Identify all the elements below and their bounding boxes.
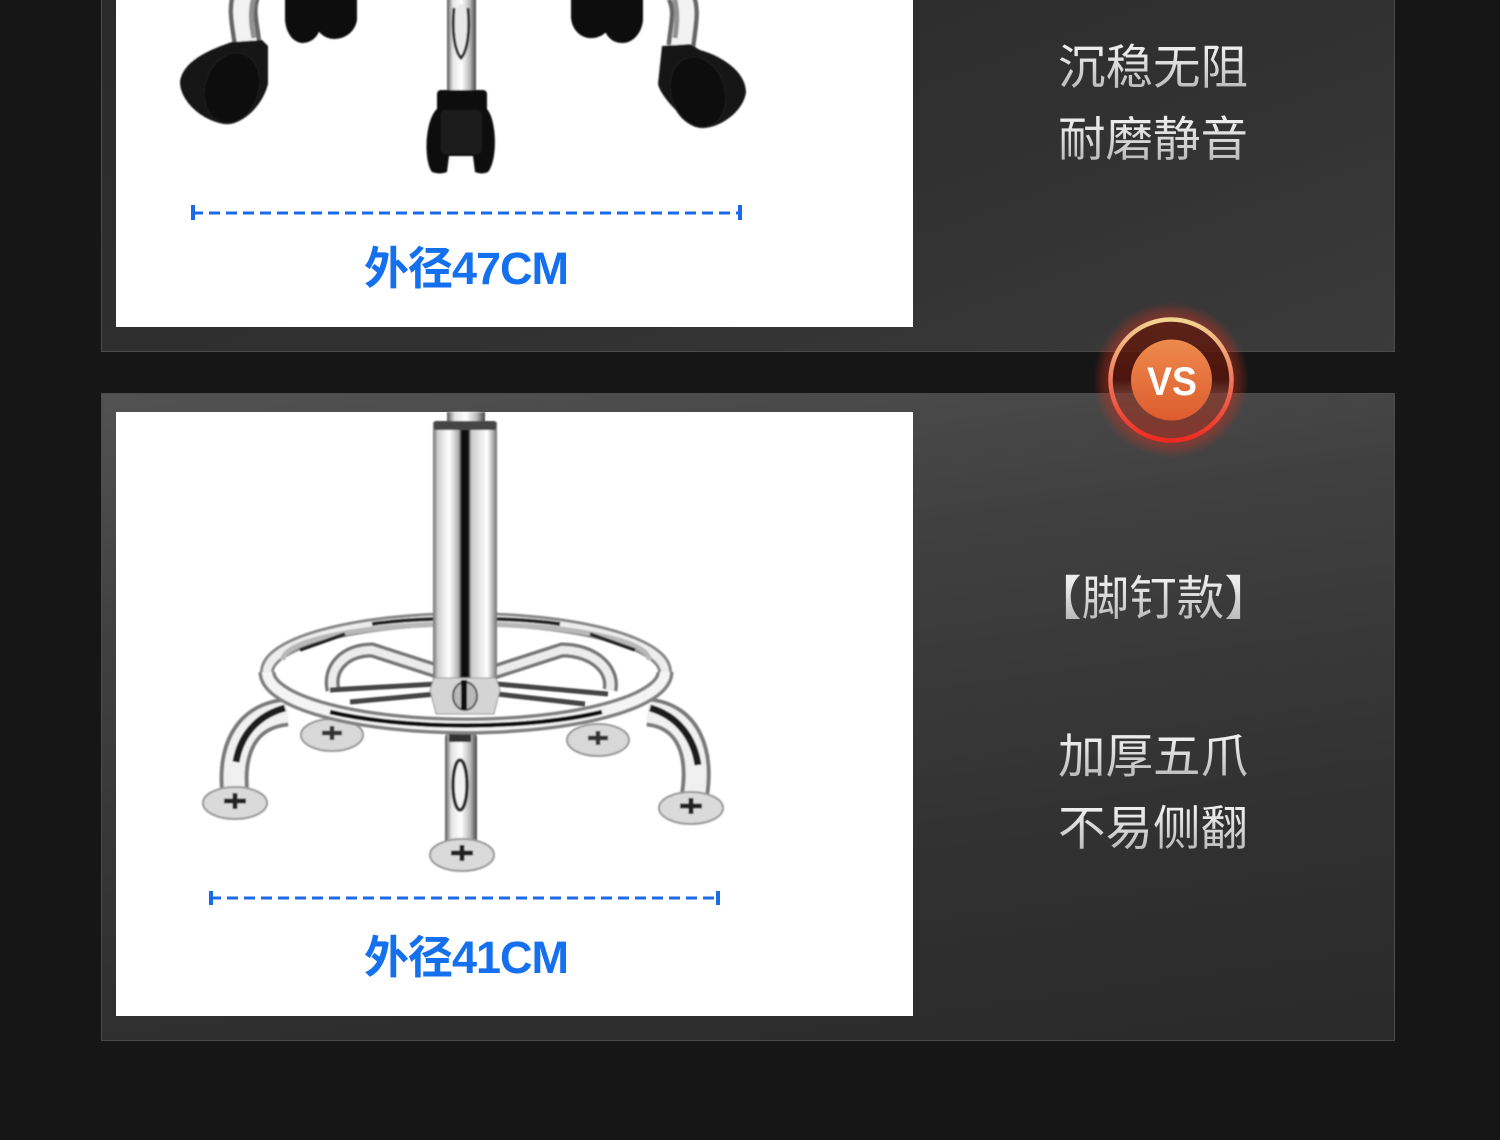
center leg tube: [447, 0, 476, 94]
column socket: [430, 678, 500, 714]
center caster: [426, 90, 495, 174]
center front leg: [445, 734, 477, 844]
icon: VS badge: [1093, 302, 1249, 458]
illustration: caster base: [180, 0, 746, 174]
right leg tube: [680, 0, 684, 46]
column: [447, 412, 485, 424]
text block: caster benefits: 沉稳无阻: [1058, 42, 1248, 95]
text block: caster benefits: [1058, 42, 1248, 167]
front feet: [203, 787, 267, 819]
label: outer diameter 47cm: 外径47CM: [364, 243, 568, 294]
left caster: [180, 40, 269, 131]
dimension line: 47cm: [191, 205, 742, 220]
back feet: [301, 719, 363, 751]
text block: foot-pad benefits: 不易侧翻: [1058, 803, 1248, 856]
dimension line: 41cm: [209, 891, 720, 905]
back casters: [285, 0, 643, 43]
casters product photo background: [116, 0, 913, 327]
foot ring front half: [267, 672, 665, 726]
front legs: [234, 712, 287, 795]
text block: foot-pad benefits: 加厚五爪: [1058, 731, 1248, 784]
heading: foot-pad variant: 【脚钉款】: [1034, 573, 1272, 626]
text block: foot-pad benefits: [1058, 731, 1248, 856]
icon: VS badge: VS: [1147, 360, 1197, 404]
foot ring back half: [267, 619, 665, 672]
panel: foot-pad variant: [101, 393, 1395, 1041]
right caster: [658, 44, 746, 135]
back legs and spokes: [332, 650, 440, 690]
label: outer diameter 41cm: 外径41CM: [364, 932, 568, 983]
illustration: stool column and five-claw base: [203, 412, 723, 871]
text block: caster benefits: 耐磨静音: [1058, 114, 1248, 167]
foot-pad product photo background: [116, 412, 913, 1016]
panel: casters variant: [101, 0, 1395, 352]
left leg tube: [243, 0, 247, 44]
